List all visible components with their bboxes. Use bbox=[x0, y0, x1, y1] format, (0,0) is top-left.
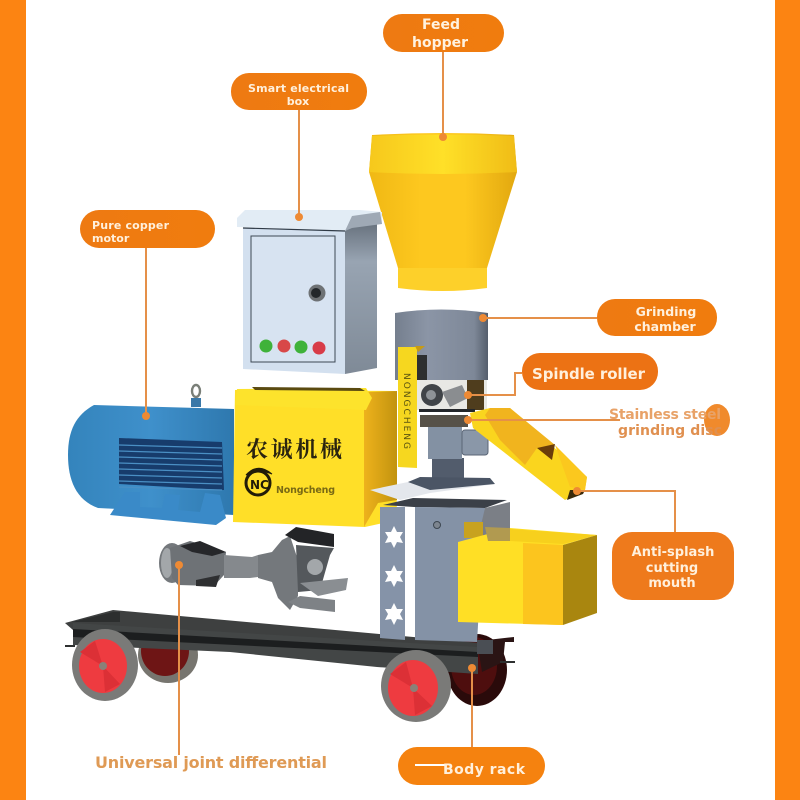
label: anti-splash cutting mouth: Anti-splash bbox=[632, 545, 714, 560]
front left wheel bbox=[72, 629, 138, 701]
star cutouts bbox=[385, 526, 403, 625]
motor feet bbox=[110, 492, 226, 525]
grinding assembly: NONGCHENG bbox=[401, 373, 411, 449]
label: spindle roller: Spindle roller bbox=[532, 365, 646, 383]
yellow transmission cover bbox=[233, 387, 397, 527]
box side bbox=[345, 224, 377, 374]
fin highlights bbox=[119, 445, 222, 490]
rack frame bbox=[65, 610, 515, 674]
label: anti-splash cutting mouth: mouth bbox=[648, 576, 696, 591]
motor body bbox=[68, 405, 234, 515]
label: universal joint differential: Universal joint differential bbox=[95, 753, 327, 772]
label: smart electrical box: box bbox=[287, 95, 309, 108]
brand latin: Nongcheng bbox=[276, 485, 335, 496]
box front bbox=[243, 228, 345, 374]
leader dots bbox=[142, 133, 581, 672]
label: feed hopper: hopper bbox=[412, 35, 468, 51]
label: smart electrical box bbox=[231, 73, 367, 110]
eye bolt bbox=[191, 385, 201, 407]
yellow discharge chute bbox=[470, 408, 587, 500]
pedestal bbox=[432, 458, 464, 484]
label: stainless steel grinding disc: Stainless steel bbox=[609, 407, 721, 423]
logo bbox=[246, 468, 272, 495]
anti-splash cutting mouth bbox=[458, 527, 597, 625]
label: body rack bbox=[398, 747, 545, 785]
grinding chamber cylinder bbox=[395, 310, 488, 380]
logo: NC bbox=[250, 478, 269, 492]
smart electrical box bbox=[237, 210, 382, 374]
label: spindle roller bbox=[522, 353, 658, 390]
brand name: 农诚机械 bbox=[245, 433, 342, 464]
label: smart electrical box: Smart electrical bbox=[248, 82, 349, 95]
label: feed hopper: Feed bbox=[422, 17, 460, 33]
door bbox=[251, 236, 335, 362]
label: pure copper motor: Pure copper bbox=[92, 219, 170, 232]
buttons bbox=[260, 340, 326, 354]
front right wheel bbox=[381, 650, 451, 722]
label: anti-splash cutting mouth bbox=[612, 532, 734, 600]
cooling fins bbox=[119, 438, 224, 490]
label: feed hopper bbox=[383, 14, 504, 52]
label: anti-splash cutting mouth: cutting bbox=[646, 561, 698, 576]
yellow plate bbox=[398, 347, 417, 468]
left orange border bbox=[0, 0, 26, 800]
column plates bbox=[380, 507, 405, 640]
bolt bbox=[434, 522, 440, 528]
body rack with wheels bbox=[65, 610, 515, 722]
spindle rollers bbox=[417, 380, 487, 412]
box lid bbox=[237, 210, 382, 231]
label: pure copper motor: motor bbox=[92, 232, 130, 245]
column top bbox=[383, 498, 507, 508]
rear left wheel bbox=[138, 626, 198, 683]
label: grinding chamber: chamber bbox=[634, 319, 697, 334]
right orange border bbox=[775, 0, 800, 800]
label: stainless steel grinding disc: grinding disc bbox=[618, 423, 722, 439]
label: stainless steel grinding disc bbox=[609, 404, 730, 439]
rear right wheel bbox=[447, 634, 507, 706]
key lock bbox=[308, 284, 326, 302]
warning label bbox=[464, 522, 483, 538]
grinding disc bbox=[420, 415, 468, 427]
grinding assembly bbox=[370, 310, 495, 500]
label: grinding chamber bbox=[597, 299, 717, 336]
leader lines bbox=[146, 52, 675, 755]
base plate bbox=[370, 482, 495, 500]
label: grinding chamber: Grinding bbox=[636, 304, 696, 319]
universal joint differential bbox=[159, 527, 348, 612]
label: body rack: Body rack bbox=[443, 762, 526, 778]
pure copper motor bbox=[68, 385, 234, 525]
lower housing bbox=[428, 427, 462, 459]
base column with stars bbox=[380, 498, 510, 654]
feed hopper bbox=[369, 133, 517, 291]
label: pure copper motor bbox=[80, 210, 215, 248]
